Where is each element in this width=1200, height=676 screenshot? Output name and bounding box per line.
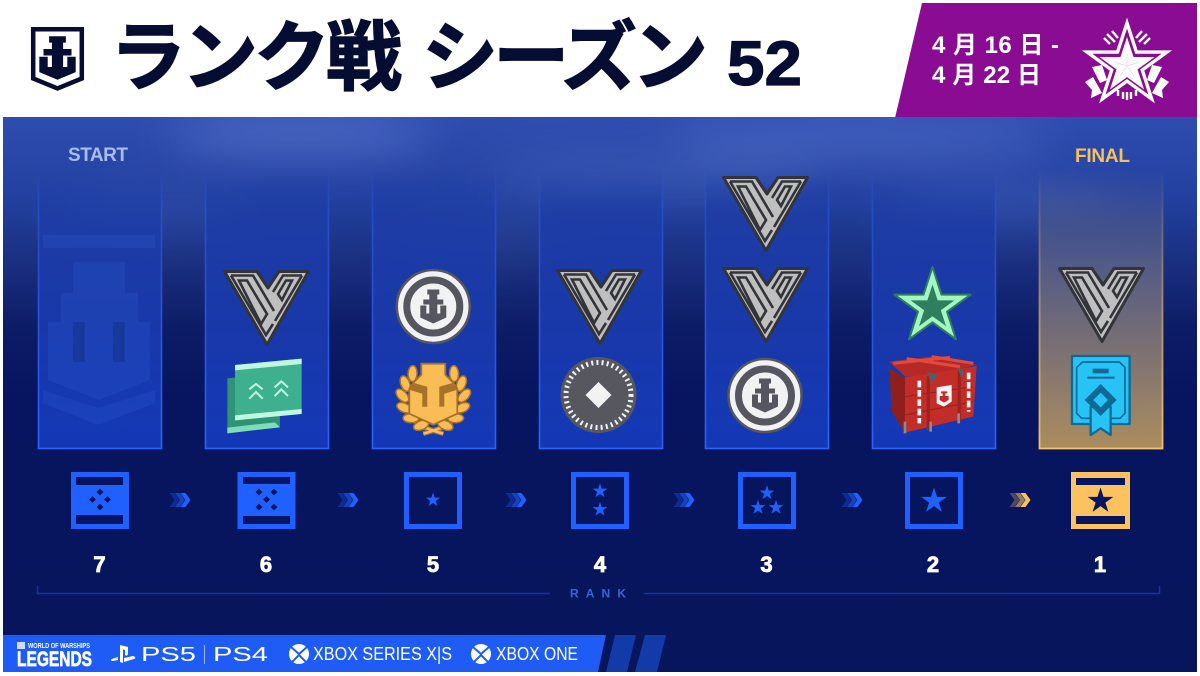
footer platform bar xyxy=(3,635,606,672)
column: rank 3 xyxy=(706,170,828,448)
rank numbers: 4 xyxy=(594,552,607,577)
arrow xyxy=(506,493,526,507)
header logo: shield with anchor xyxy=(33,29,82,88)
icon: gold laurel medal xyxy=(394,364,473,434)
logo: Xbox One xyxy=(471,644,578,664)
icon: blue certificate xyxy=(1072,356,1130,435)
column: rank 1 FINAL xyxy=(1040,170,1162,448)
date range xyxy=(932,32,1059,89)
icon: season star emblem xyxy=(1085,23,1169,100)
icon: chevron insignia xyxy=(1060,268,1144,342)
rank numbers: 1 xyxy=(1094,552,1106,577)
date banner xyxy=(895,3,1197,118)
rank numbers xyxy=(94,556,1106,572)
rank numbers: 6 xyxy=(260,552,272,577)
logo: PlayStation xyxy=(111,644,268,666)
logo: World of Warships Legends: WORLD OF WARSHIPS xyxy=(28,643,90,650)
icon: chevron insignia top xyxy=(724,178,808,250)
column: rank 5 xyxy=(372,170,496,448)
rank icon 7 xyxy=(71,472,129,529)
icon: green banner xyxy=(227,359,302,433)
title: 52 xyxy=(727,29,802,99)
column: rank 7 START xyxy=(38,170,162,448)
column: rank 2 xyxy=(872,170,996,448)
rank numbers: 7 xyxy=(93,552,106,577)
rank axis: RANK xyxy=(570,586,626,600)
label: FINAL: FINAL xyxy=(1075,146,1130,167)
rank icon 5 xyxy=(406,474,460,526)
rank numbers: 5 xyxy=(427,552,439,577)
logo: Xbox Series X|S: XBOX SERIES X|S xyxy=(313,644,452,664)
arrow xyxy=(338,493,358,507)
date range: 4 月 16 日 - xyxy=(932,32,1059,59)
logo: World of Warships Legends xyxy=(17,642,92,671)
title xyxy=(110,16,802,101)
label: START: START xyxy=(68,145,128,166)
rank numbers: 2 xyxy=(927,552,939,577)
column: rank 6 xyxy=(206,170,328,448)
logo: PlayStation: PS5 xyxy=(141,644,196,666)
icon: chevron insignia xyxy=(558,270,642,344)
icon: chevron insignia xyxy=(224,272,308,344)
arrow xyxy=(674,493,694,507)
column: rank 4 xyxy=(540,170,662,448)
arrow: gold xyxy=(1010,493,1030,507)
clouds xyxy=(181,117,1040,226)
arrow xyxy=(842,493,862,507)
rank icon 2 xyxy=(908,474,960,526)
title: シーズン xyxy=(422,16,708,101)
rank icon 1 xyxy=(1071,472,1130,529)
arrow xyxy=(170,493,190,507)
watermark shield xyxy=(43,235,155,404)
date range: 4 月 22 日 xyxy=(932,62,1041,89)
icon: green star xyxy=(894,267,971,339)
rank axis xyxy=(38,586,1160,600)
icon: chevron insignia middle xyxy=(724,268,808,342)
logo: Xbox One: XBOX ONE xyxy=(496,644,578,664)
rank numbers: 3 xyxy=(760,552,773,577)
rank icon 3 xyxy=(740,474,794,526)
title: ランク戦 xyxy=(110,16,402,101)
icon: anchor coin xyxy=(397,270,470,343)
logo: PlayStation: PS4 xyxy=(213,644,268,666)
footer accent stripes xyxy=(606,635,666,672)
rank icon 6 xyxy=(238,472,296,529)
icon: red crate xyxy=(889,356,977,433)
icon: dark diamond coin xyxy=(560,357,636,433)
logo: World of Warships Legends: LEGENDS xyxy=(17,648,92,671)
icon: anchor coin xyxy=(728,359,802,432)
rank icon 4 xyxy=(574,474,626,526)
